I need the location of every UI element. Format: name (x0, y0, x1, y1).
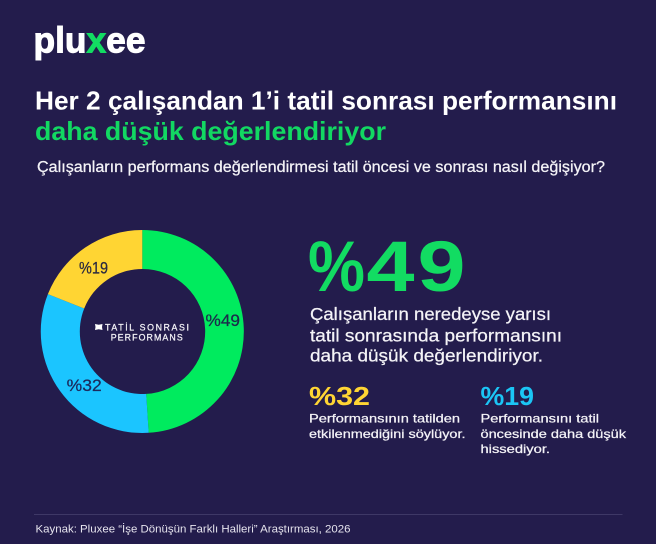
source note: Kaynak: Pluxee “İşe Dönüşün Farklı Halleri” Araştırması, 2026 (36, 523, 350, 536)
stat description: daha düşük değerlendiriyor. (310, 346, 543, 366)
title: Her 2 çalışandan 1’i tatil sonrası performansını (35, 86, 617, 116)
stat description (310, 304, 562, 366)
stat: %19 (480, 381, 627, 456)
big stat: %49: 9 (418, 228, 466, 307)
title: daha düşük değerlendiriyor (35, 116, 386, 146)
label: %49: %49 (206, 311, 240, 330)
stat: %32: etkilenmediğini söylüyor. (309, 427, 466, 441)
big stat: %49 (308, 228, 466, 307)
center label (105, 322, 189, 342)
stat: %19: öncesinde daha düşük (480, 427, 627, 441)
center label: PERFORMANS (111, 332, 183, 342)
icon: pluxee x mark (95, 324, 102, 330)
stat: %32: %32 (309, 381, 370, 411)
subtitle: Çalışanların performans değerlendirmesi tatil öncesi ve sonrası nasıl değişiyor? (37, 159, 605, 176)
stat: %19: Performansını tatil (480, 412, 599, 426)
stat: %19: hissediyor. (480, 442, 550, 456)
title (35, 86, 617, 146)
stat: %32 (309, 381, 466, 441)
stat: %32: Performansının tatilden (309, 412, 460, 426)
big stat: %49: % (308, 228, 365, 307)
label: %32: %32 (67, 376, 102, 395)
segment: 32% blue (41, 294, 149, 433)
donut chart (41, 230, 244, 433)
stat description: tatil sonrasında performansını (310, 326, 562, 346)
logo: pluxee: pluxee (34, 20, 146, 60)
center label: TATİL SONRASI (105, 322, 189, 332)
segment: 49% green (142, 230, 244, 433)
segment: 19% yellow (48, 230, 142, 308)
stat description: Çalışanların neredeyse yarısı (310, 304, 551, 324)
label: %19: %19 (79, 258, 108, 277)
stat: %19: %19 (480, 381, 534, 411)
big stat: %49: 4 (366, 228, 415, 307)
